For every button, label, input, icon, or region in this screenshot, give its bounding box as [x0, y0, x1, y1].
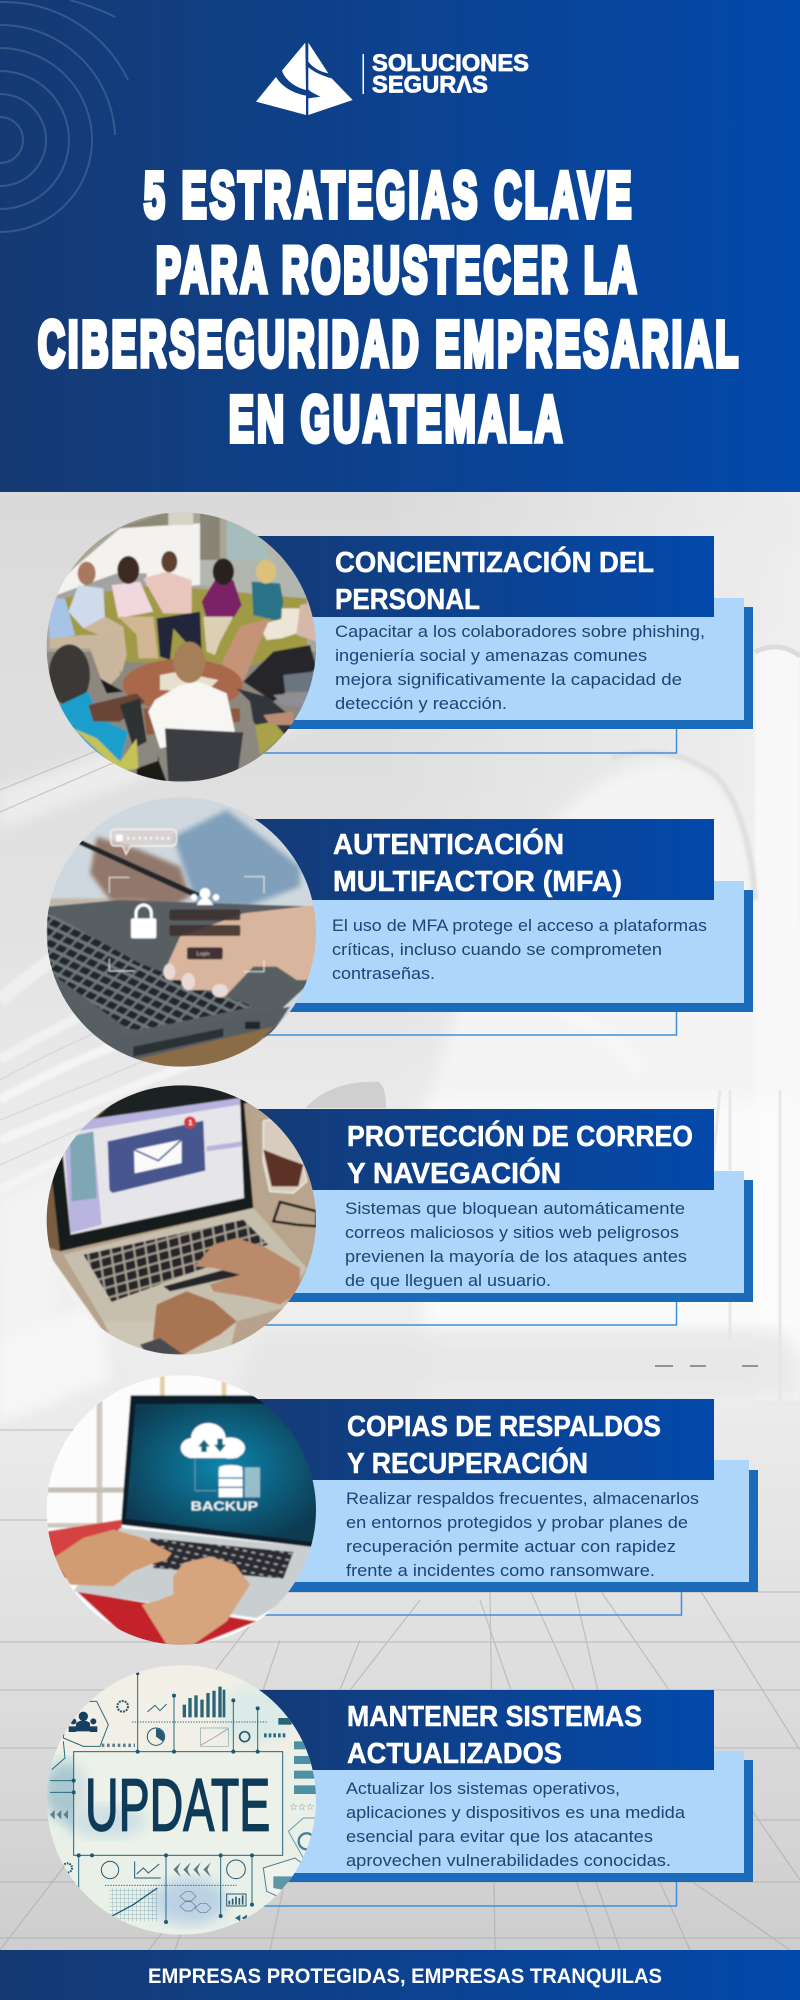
heading: MANTENER SISTEMAS: [347, 1701, 642, 1733]
body text: aplicaciones y dispositivos es una medida: [346, 1803, 686, 1822]
table: [123, 659, 243, 711]
body text: [345, 1199, 687, 1290]
body text: en entornos protegidos y probar planes de: [346, 1513, 688, 1532]
update box and text: [74, 1752, 283, 1855]
photo: MFA login on laptop: ••••••••: [127, 833, 170, 843]
body text: críticas, incluso cuando se comprometen: [332, 940, 662, 959]
heading: COPIAS DE RESPALDOS: [347, 1411, 661, 1443]
background: architecture photo: [0, 490, 800, 2000]
footer slogan: EMPRESAS PROTEGIDAS, EMPRESAS TRANQUILAS: [148, 1965, 662, 1988]
body text: aprovechen vulnerabilidades conocidas.: [346, 1851, 671, 1870]
body text: esencial para evitar que los atacantes: [346, 1827, 653, 1846]
body text: frente a incidentes como ransomware.: [346, 1561, 655, 1580]
card 2: autenticación: [230, 819, 753, 1035]
password bubble: [111, 829, 177, 854]
logo mark: [256, 43, 353, 115]
photo: update dashboard graphic: UPDATE: [85, 1763, 270, 1846]
login fields: [169, 909, 240, 920]
body text: de que lleguen al usuario.: [345, 1271, 551, 1290]
photo: cloud backup on laptop: [46, 1376, 316, 1645]
back person: [173, 642, 205, 683]
body text: contraseñas.: [332, 964, 435, 983]
header band: [0, 0, 800, 492]
card 5: actualizados: [230, 1690, 753, 1906]
body text: Sistemas que bloquean automáticamente: [345, 1199, 685, 1218]
database: [219, 1465, 243, 1497]
top bezel: [95, 1085, 248, 1119]
card 1: concientización: [230, 536, 753, 753]
heading: ACTUALIZADOS: [347, 1738, 562, 1770]
heading: AUTENTICACIÓN: [333, 829, 564, 861]
logo: [256, 43, 529, 115]
stacked bars: [294, 1741, 317, 1794]
people: [68, 585, 105, 628]
laptop lid: [121, 1395, 320, 1548]
body text: [346, 1779, 686, 1870]
photo: email alert on laptop: 1: [188, 1118, 192, 1127]
lock icon: [131, 905, 156, 938]
hand: [163, 905, 317, 997]
photo: update dashboard graphic: [46, 1666, 316, 1935]
laptop base: [63, 1208, 307, 1321]
body text: Actualizar los sistemas operativos,: [346, 1779, 620, 1798]
right side legs: [243, 645, 317, 702]
decorative concentric rings: [0, 0, 128, 232]
logo wordmark: SOLUCIONES: [372, 50, 529, 77]
body text: [346, 1489, 699, 1580]
card 3: correo: [230, 1109, 753, 1325]
circuit lines: [50, 1674, 267, 1921]
title: EN GUATEMALA: [229, 385, 562, 456]
body text: correos maliciosos y sitios web peligrosos: [345, 1223, 679, 1242]
title: PARA ROBUSTECER LA: [156, 236, 636, 307]
heading: PROTECCIÓN DE CORREO: [347, 1121, 693, 1153]
title: 5 ESTRATEGIAS CLAVE: [144, 161, 631, 232]
bars top: [183, 1687, 292, 1725]
laptop body: [47, 900, 317, 1067]
stars and target: ☆☆☆: [289, 1802, 314, 1812]
heading: [335, 547, 654, 616]
hands: [195, 1238, 300, 1305]
photo: MFA login on laptop: [46, 798, 316, 1067]
photo: team meeting in a circle: [46, 512, 316, 782]
body text: El uso de MFA protege el acceso a plataformas: [332, 916, 707, 935]
heading: PERSONAL: [335, 584, 480, 616]
teal woman: [49, 644, 90, 706]
floor tile lines: [0, 1400, 800, 2000]
body text: [335, 622, 705, 713]
heading: CONCIENTIZACIÓN DEL: [335, 547, 654, 579]
small charts and gears: [117, 1701, 128, 1712]
people icon: [69, 1712, 97, 1732]
phone: [77, 839, 200, 898]
heading: Y NAVEGACIÓN: [347, 1158, 561, 1190]
sofa: [60, 585, 307, 665]
photo: email alert on laptop: [46, 1085, 316, 1355]
heading: [347, 1121, 693, 1190]
heading: MULTIFACTOR (MFA): [333, 866, 622, 898]
body text: Capacitar a los colaboradores sobre phishing,: [335, 622, 705, 641]
card 4: respaldos: [230, 1399, 758, 1615]
title: CIBERSEGURIDAD EMPRESARIAL: [38, 310, 738, 381]
hands: [53, 1530, 172, 1586]
photo: MFA login on laptop: Login: [197, 951, 210, 957]
users icon: [191, 888, 219, 905]
body text: ingeniería social y amenazas comunes: [335, 646, 647, 665]
body text: previenen la mayoría de los ataques antes: [345, 1247, 687, 1266]
heading: Y RECUPERACIÓN: [347, 1448, 588, 1480]
heading: [347, 1411, 661, 1480]
logo wordmark: SEGURΛS: [372, 72, 488, 98]
heading: [347, 1701, 642, 1770]
heading: [333, 829, 622, 898]
body text: recuperación permite actuar con rapidez: [346, 1537, 676, 1556]
lower icons: [101, 1861, 119, 1879]
logo wordmark: [372, 50, 529, 98]
body text: Realizar respaldos frecuentes, almacenarlos: [346, 1489, 699, 1508]
title: [38, 161, 738, 456]
cloud: [181, 1423, 245, 1459]
red desk: [48, 1518, 124, 1579]
laptop base: [73, 1528, 320, 1618]
cup and glasses: [263, 1120, 307, 1193]
screen: [48, 1095, 253, 1251]
body text: [332, 916, 707, 983]
email card: [108, 1121, 205, 1193]
photo: cloud backup on laptop: BACKUP: [191, 1499, 258, 1514]
body text: mejora significativamente la capacidad de: [335, 670, 682, 689]
footer band: [0, 1950, 800, 2000]
body text: detección y reacción.: [335, 694, 507, 713]
